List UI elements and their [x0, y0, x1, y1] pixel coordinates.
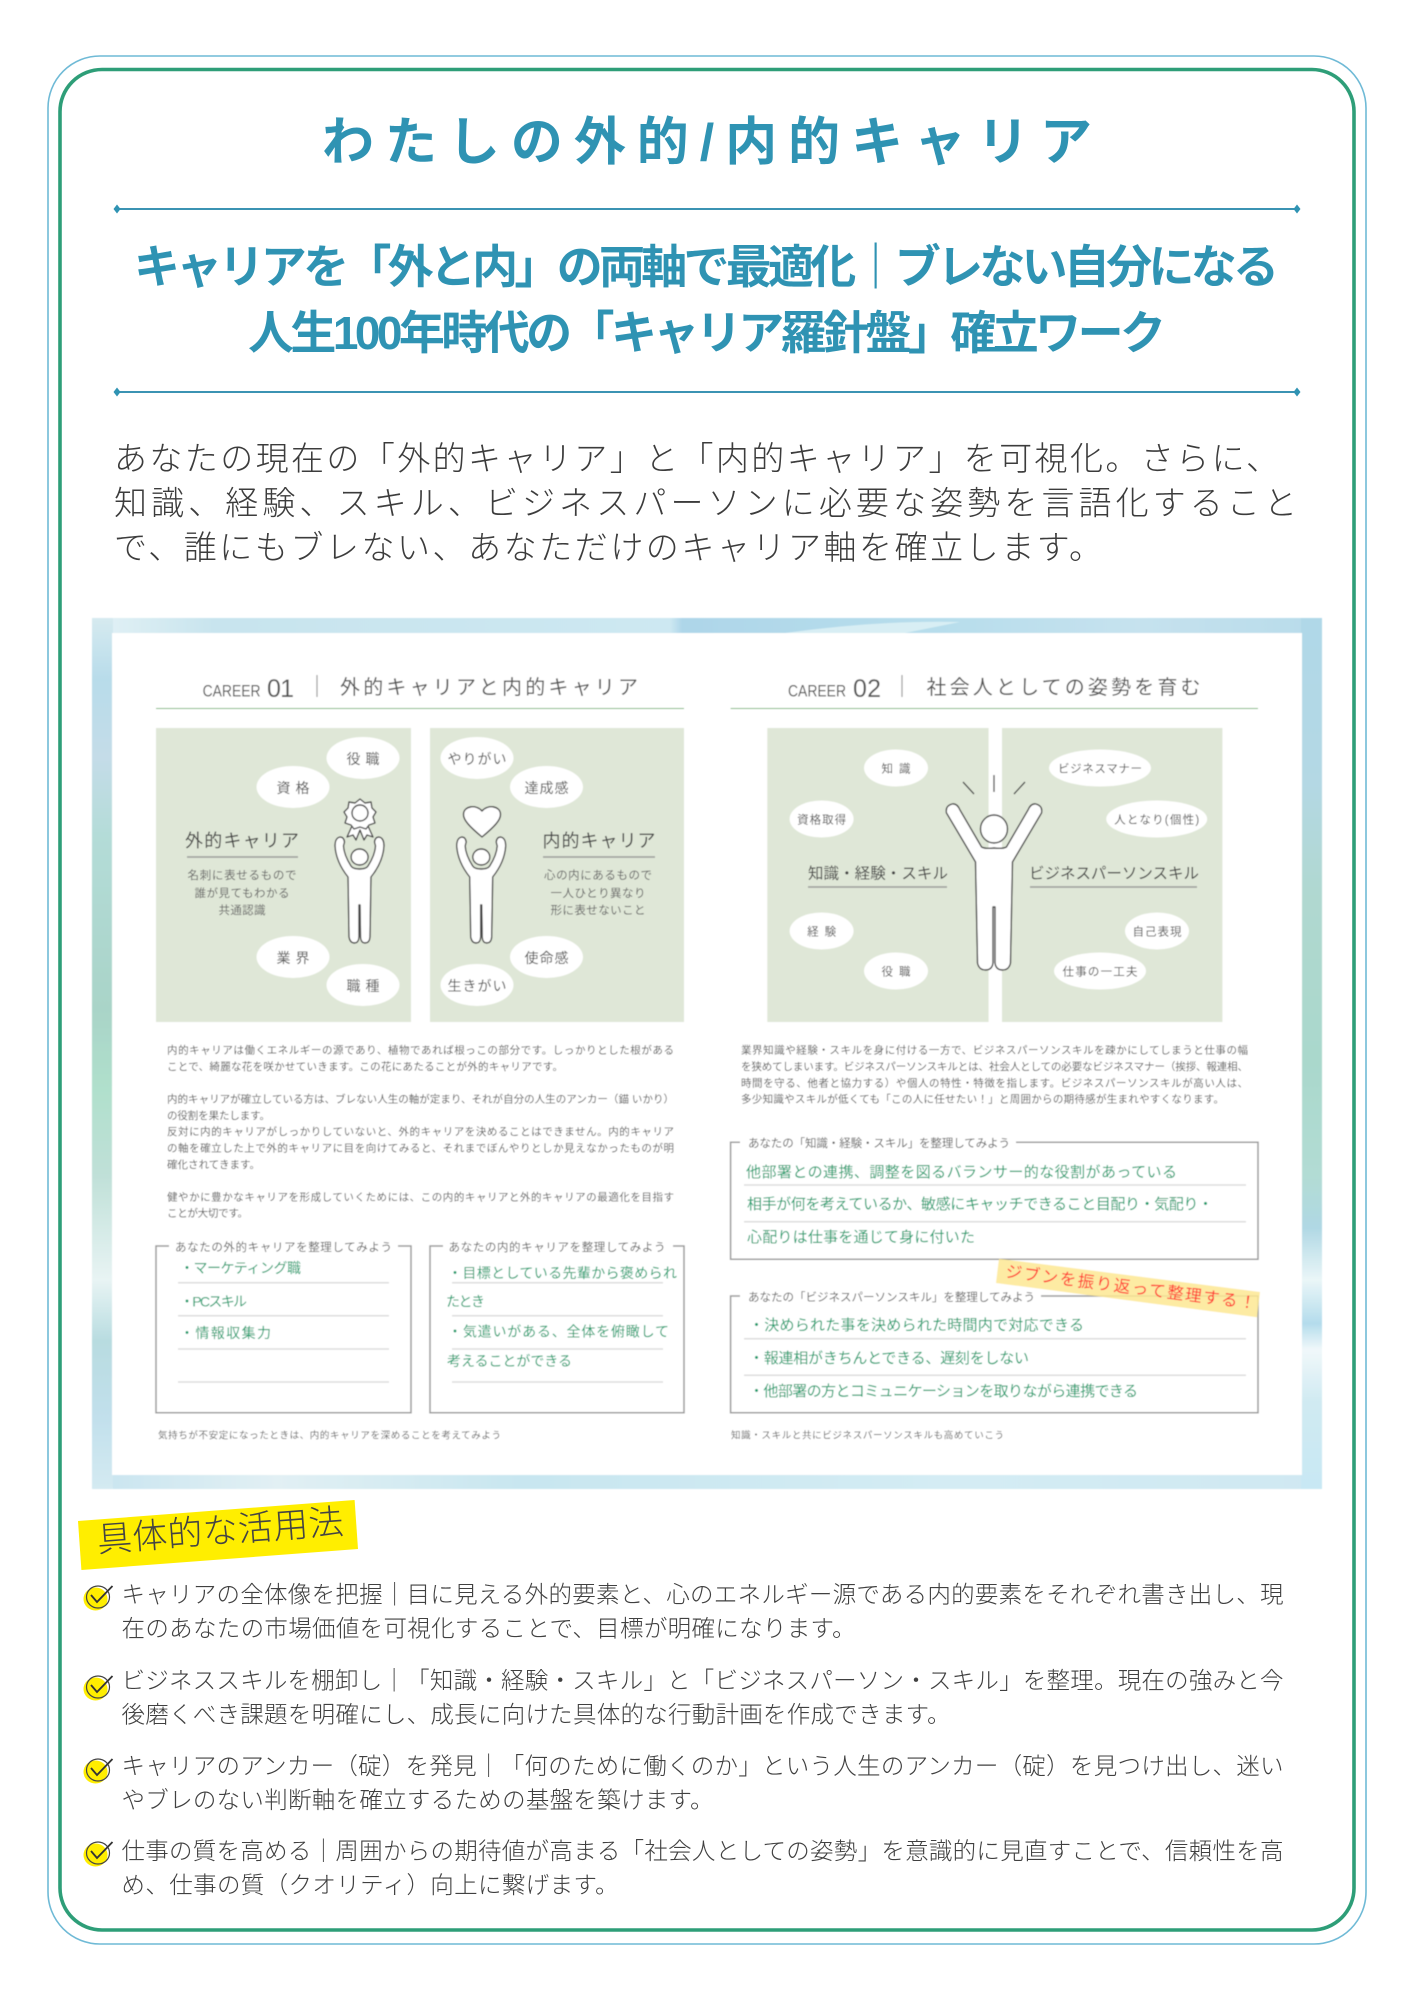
explanation text left: 健やかに豊かなキャリアを形成していくためには、この内的キャリアと外的キャリアの最適化を目指す: [167, 1190, 674, 1204]
explanation text right: 多少知識やスキルが低くても「この人に任せたい！」と周囲からの期待感が生まれやすくなります。: [741, 1092, 1224, 1106]
bubbles: knowledge: 知識: [882, 762, 911, 776]
inner career label: 形に表せないこと: [550, 904, 646, 917]
explanation text right: 時間を守る、他者と協力する）や個人の特性・特徴を指します。ビジネスパーソンスキルが高い人は、: [741, 1076, 1248, 1090]
worksheet box: inner career: あなたの内的キャリアを整理してみよう: [448, 1240, 666, 1254]
worksheet image panel: [92, 618, 1322, 1489]
list item 2: [84, 1668, 1284, 1728]
list item 4: め、仕事の質（クオリティ）向上に繋げます。: [122, 1872, 618, 1898]
inner career label: [542, 831, 656, 917]
outer career label: 共通認識: [218, 904, 266, 917]
icon: cheering person: [946, 775, 1042, 970]
bubbles: inner career: 生きがい: [448, 978, 506, 994]
explanation text left: ことで、綺麗な花を咲かせていきます。この花にあたることが外的キャリアです。: [167, 1060, 563, 1073]
subtitle: キャリアを「外と内」の両軸で最適化｜ブレない自分になる: [134, 241, 1279, 293]
intro paragraph: で、誰にもブレない、あなただけのキャリア軸を確立します。: [114, 529, 1102, 566]
list item 4: [84, 1838, 1284, 1898]
worksheet box: inner career: ・目標としている先輩から褒められ: [448, 1265, 677, 1281]
list item 1: キャリアの全体像を把握｜目に見える外的要素と、心のエネルギー源である内的要素をそれぞれ書き出し、現: [122, 1582, 1284, 1608]
list item 3: [84, 1753, 1284, 1813]
list item 2: ビジネススキルを棚卸し｜「知識・経験・スキル」と「ビジネスパーソン・スキル」を整理。現在の強みと今: [122, 1668, 1284, 1694]
bubbles: knowledge: 資格取得: [797, 812, 846, 826]
footnote right: 知識・スキルと共にビジネスパーソンスキルも高めていこう: [731, 1430, 1004, 1442]
explanation text left: の役割を果たします。: [167, 1109, 270, 1122]
knowledge label: 知識・経験・スキル: [808, 864, 948, 882]
worksheet box: knowledge and skills: あなたの「知識・経験・スキル」を整理してみよう: [748, 1136, 1010, 1150]
panel: knowledge: [767, 728, 989, 1022]
bubbles: inner career: [440, 737, 583, 1006]
icon: person with heart: [457, 807, 506, 943]
worksheet box: business person skills: ・報連相がきちんとできる、遅刻をしない: [749, 1350, 1029, 1367]
worksheet box: outer career: ・情報収集力: [180, 1325, 271, 1341]
subtitle: [134, 241, 1279, 359]
intro paragraph: [114, 440, 1297, 566]
icon: check: [84, 1676, 112, 1700]
worksheet box: knowledge and skills: 相手が何を考えているか、敏感にキャッチできること目配り・気配り・: [747, 1196, 1213, 1213]
section 1 header: 01: [267, 675, 294, 703]
panel: business skill: [1002, 728, 1222, 1022]
intro paragraph: あなたの現在の「外的キャリア」と「内的キャリア」を可視化。さらに、: [114, 440, 1279, 477]
worksheet box: inner career: [430, 1240, 684, 1413]
worksheet box: inner career: ・気遣いがある、全体を俯瞰して: [448, 1324, 669, 1340]
outer career label: 名刺に表せるもので: [188, 868, 296, 882]
explanation text right: を狭めてしまいます。ビジネスパーソンスキルとは、社会人としての必要なビジネスマナー（挨拶、報連相、: [741, 1060, 1248, 1073]
list item 3: キャリアのアンカー（碇）を発見｜「何のために働くのか」という人生のアンカー（碇）を見つけ出し、迷い: [122, 1753, 1284, 1779]
section 1 header: CAREER: [203, 682, 261, 700]
outer career label: 誰が見てもわかる: [194, 886, 290, 900]
inner career label: 内的キャリア: [542, 831, 656, 851]
list item 1: [84, 1582, 1284, 1642]
divider top: [114, 204, 1300, 214]
worksheet box: business person skills: [731, 1290, 1258, 1413]
icon: person with award: [335, 799, 384, 943]
panel: outer career: [156, 728, 411, 1022]
panel: inner career: [430, 728, 684, 1022]
worksheet box: knowledge and skills: 心配りは仕事を通じて身に付いた: [747, 1229, 975, 1246]
bubbles: outer career: [256, 737, 400, 1006]
bubbles: knowledge: 経験: [807, 924, 837, 938]
section 1 header: 外的キャリアと内的キャリア: [340, 676, 638, 699]
white sheet: [112, 633, 1302, 1475]
heading label: how to use: 具体的な活用法: [96, 1503, 345, 1560]
bubbles: outer career: 役職: [346, 751, 380, 767]
explanation text left: ことが大切です。: [167, 1206, 248, 1220]
divider bottom: [114, 388, 1300, 396]
bubbles: outer career: 職種: [346, 978, 380, 994]
bubbles: inner career: 達成感: [524, 780, 568, 796]
bubbles: business skill: 人となり(個性): [1114, 812, 1199, 826]
explanation text left: 反対に内的キャリアがしっかりしていないと、外的キャリアを決めることはできません。内的キャリア: [167, 1125, 674, 1138]
bubbles: outer career: 業界: [276, 950, 310, 966]
bubbles: business skill: [1049, 750, 1207, 990]
section 1 header: [156, 675, 684, 708]
footnote left: 気持ちが不安定になったときは、内的キャリアを深めることを考えてみよう: [158, 1430, 501, 1442]
subtitle: 人生100年時代の「キャリア羅針盤」確立ワーク: [248, 307, 1166, 359]
section 2 header: 社会人としての姿勢を育む: [926, 676, 1200, 699]
bubbles: knowledge: [790, 750, 928, 990]
outer career label: 外的キャリア: [185, 831, 299, 851]
worksheet box: outer career: [156, 1240, 411, 1413]
explanation text right: 業界知識や経験・スキルを身に付ける一方で、ビジネスパーソンスキルを疎かにしてしまうと仕事の幅: [741, 1044, 1248, 1056]
bubbles: business skill: 仕事の一工夫: [1062, 966, 1138, 978]
worksheet box: knowledge and skills: 他部署との連携、調整を図るバランサー的な役割があっている: [746, 1164, 1177, 1181]
explanation text right: [741, 1044, 1248, 1106]
watercolor background: [92, 618, 1322, 1489]
explanation text left: の軸を確立した上で外的キャリアに目を向けてみると、それまでぼんやりとしか見えなかったものが明: [167, 1142, 674, 1154]
worksheet box: business person skills: ・決められた事を決められた時間内で対応できる: [749, 1317, 1084, 1334]
bubbles: business skill: ビジネスマナー: [1058, 762, 1142, 776]
list item 4: 仕事の質を高める｜周囲からの期待値が高まる「社会人としての姿勢」を意識的に見直すことで、信頼性を高: [122, 1838, 1284, 1864]
callout: reflect on yourself: ジブンを振り返って整理する！: [1004, 1261, 1257, 1313]
explanation text left: 確化されてきます。: [167, 1158, 260, 1171]
section 2 header: [731, 675, 1258, 708]
title: わたしの外的/内的キャリア: [322, 114, 1092, 172]
icon: check: [84, 1759, 112, 1784]
inner career label: 一人ひとり異なり: [550, 887, 646, 900]
explanation text left: 内的キャリアが確立している方は、ブレない人生の軸が定まり、それが自分の人生のアンカー（錨 いかり）: [167, 1092, 674, 1106]
icon: check: [84, 1586, 112, 1610]
bubbles: knowledge: 役職: [882, 964, 911, 978]
bubbles: outer career: 資格: [276, 780, 310, 796]
explanation text left: [167, 1044, 674, 1220]
worksheet box: inner career: 考えることができる: [447, 1353, 572, 1369]
explanation text left: 内的キャリアは働くエネルギーの源であり、植物であれば根っこの部分です。しっかりとした根がある: [167, 1044, 674, 1056]
inner career label: 心の内にあるもので: [544, 868, 652, 882]
section 2 header: CAREER: [788, 682, 846, 700]
worksheet box: inner career: たとき: [446, 1294, 485, 1310]
bubbles: business skill: 自己表現: [1132, 926, 1182, 938]
worksheet box: outer career: ・PCスキル: [180, 1294, 247, 1310]
list item 2: 後磨くべき課題を明確にし、成長に向けた具体的な行動計画を作成できます。: [122, 1702, 950, 1728]
outer career label: [185, 831, 299, 917]
icon: check: [84, 1842, 112, 1866]
worksheet box: business person skills: ・他部署の方とコミュニケーションを取りながら連携できる: [749, 1383, 1138, 1400]
worksheet box: outer career: あなたの外的キャリアを整理してみよう: [175, 1240, 392, 1254]
bubbles: inner career: やりがい: [448, 751, 506, 767]
worksheet box: outer career: ・マーケティング職: [180, 1260, 301, 1276]
list item 3: やブレのない判断軸を確立するための基盤を築けます。: [122, 1787, 714, 1813]
worksheet box: knowledge and skills: [731, 1136, 1258, 1259]
worksheet box: business person skills: あなたの「ビジネスパーソンスキル」を整理してみよう: [748, 1290, 1035, 1304]
list item 1: 在のあなたの市場価値を可視化することで、目標が明確になります。: [122, 1616, 856, 1642]
business skill label: ビジネスパーソンスキル: [1029, 864, 1199, 882]
bubbles: inner career: 使命感: [524, 950, 568, 966]
section 2 header: 02: [853, 675, 881, 703]
intro paragraph: 知識、経験、スキル、ビジネスパーソンに必要な姿勢を言語化すること: [114, 484, 1297, 522]
